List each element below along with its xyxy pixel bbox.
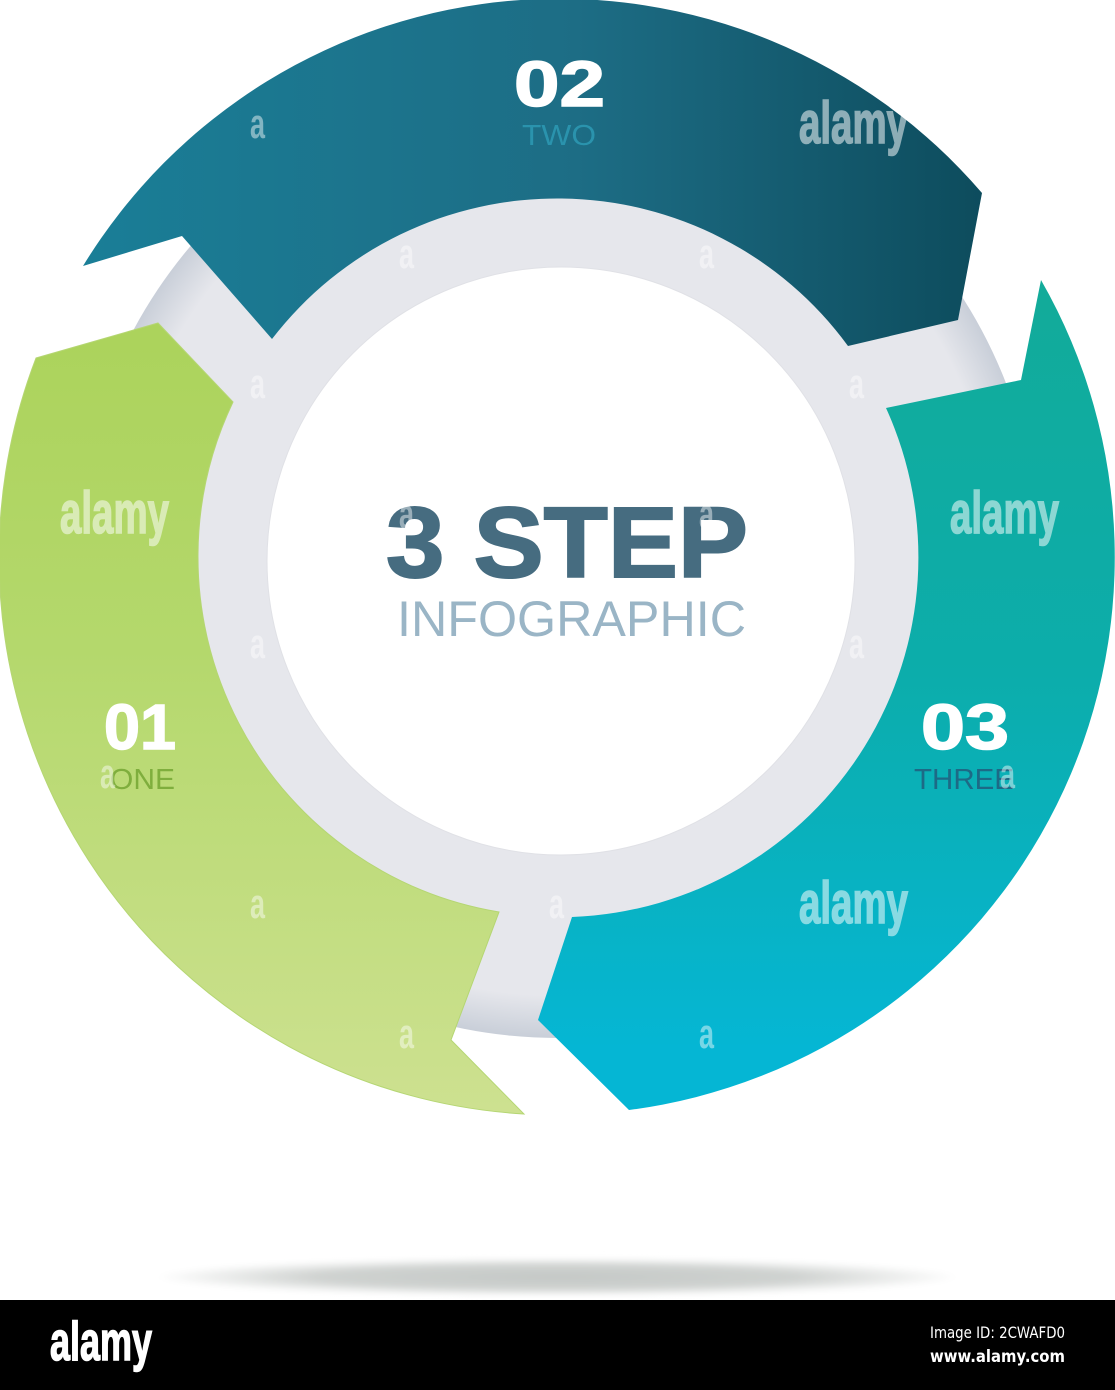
subheading INFOGRAPHIC: INFOGRAPHIC [397, 591, 746, 647]
large alamy watermarks: alamy [950, 480, 1059, 546]
small alamy watermarks: a [250, 620, 265, 667]
ground shadow [155, 1258, 959, 1296]
number 01: 01 [104, 691, 176, 763]
central title [386, 487, 748, 647]
heading 3 STEP: 3 STEP [386, 487, 748, 599]
small alamy watermarks: a [699, 230, 714, 277]
small alamy watermarks: a [1000, 750, 1015, 797]
small alamy watermarks: a [250, 360, 265, 407]
label ONE: ONE [110, 764, 175, 796]
number 02: 02 [514, 48, 605, 120]
small alamy watermarks: a [250, 100, 265, 147]
small alamy watermarks: a [399, 490, 414, 537]
segment 01: green arrow [0, 323, 524, 1114]
small alamy watermarks: a [549, 880, 564, 927]
image id: Image ID: 2CWAFD0 [930, 1323, 1065, 1342]
white centre circle [267, 267, 855, 855]
small alamy watermarks: a [399, 230, 414, 277]
large alamy watermarks [60, 90, 1059, 936]
footer alamy logo: alamy [50, 1310, 152, 1372]
segment 03: turquoise arrow [538, 280, 1115, 1110]
label TWO: TWO [522, 120, 596, 152]
grey back ring [76, 76, 1038, 1038]
label THREE: THREE [914, 764, 1014, 796]
small alamy watermarks: a [250, 880, 265, 927]
website: www.alamy.com [930, 1347, 1065, 1367]
large alamy watermarks: alamy [799, 870, 908, 936]
large alamy watermarks: alamy [60, 480, 169, 546]
small alamy watermarks: a [399, 1010, 414, 1057]
small alamy watermarks: a [699, 490, 714, 537]
small alamy watermarks [100, 100, 1015, 1057]
small alamy watermarks: a [849, 620, 864, 667]
small alamy watermarks: a [849, 360, 864, 407]
segment 02: dark teal arrow [83, 0, 982, 346]
large alamy watermarks: alamy [799, 90, 908, 156]
small alamy watermarks: a [100, 750, 115, 797]
number 03: 03 [921, 691, 1009, 763]
black footer bar [0, 1300, 1115, 1390]
small alamy watermarks: a [699, 1010, 714, 1057]
